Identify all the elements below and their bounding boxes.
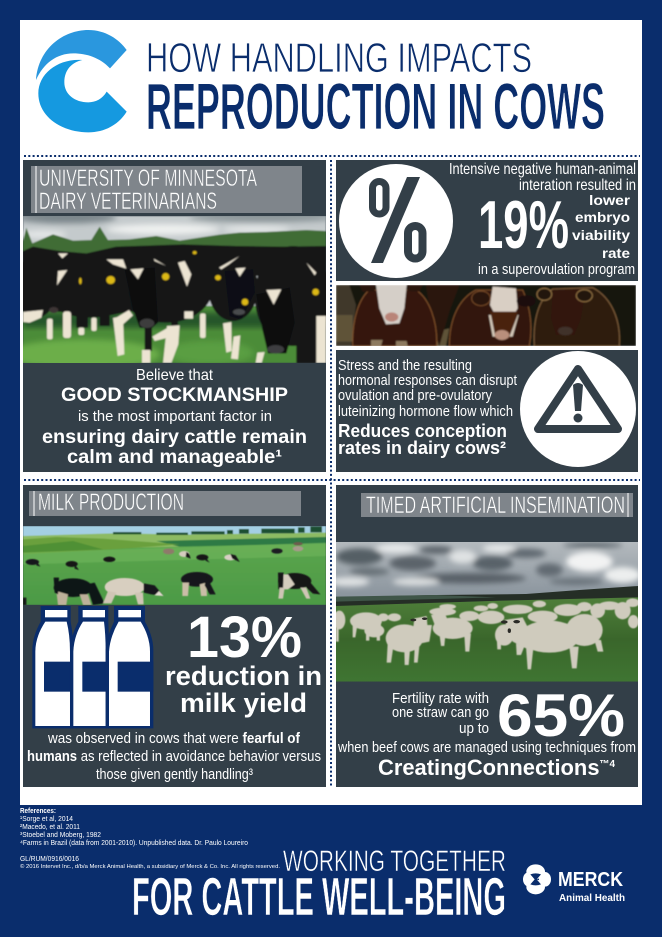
text: Believe that good stockmanship: is the most important factor in [78, 408, 272, 425]
references: ²Macedo, et al. 2011 [20, 824, 80, 831]
cattle [333, 598, 639, 669]
panel: timed artificial insemination [329, 485, 641, 787]
text: observed in fearful cows: was observed in cows that were fearful of [47, 730, 301, 747]
bottle two [70, 606, 109, 728]
text: Believe that good stockmanship: GOOD STOCKMANSHIP [61, 385, 288, 406]
photo: herd of black and white dairy cows [23, 216, 326, 363]
icon: percent sign in white circle [339, 164, 453, 278]
text: fertility rate with one straw: Fertility rate with [392, 690, 489, 707]
bottle three [106, 606, 153, 728]
text: negative interaction and 19% statistic: in a superovulation program [478, 261, 635, 278]
text: stress and hormonal responses [338, 357, 518, 458]
references: References: [20, 808, 56, 815]
heading label: University of Minnesota Dairy Veterinarians [31, 165, 302, 215]
heading label: University of Minnesota Dairy Veterinarians: UNIVERSITY OF MINNESOTA [39, 165, 257, 192]
text: stress and hormonal responses: ovulation and pre-ovulatory [338, 387, 492, 404]
text: Believe that good stockmanship: Believe that [136, 367, 214, 384]
text: Believe that good stockmanship [42, 367, 307, 468]
text: beef cows managed using CreatingConnections: CreatingConnections [378, 755, 600, 780]
title: HOW HANDLING IMPACTS [146, 34, 532, 81]
icon: three milk bottles [32, 606, 153, 728]
panel: 19% lower embryo viability [336, 160, 638, 281]
panel: stress reduces conception [336, 350, 638, 472]
statistic: 13% reduction in milk yield: reduction in [165, 661, 322, 691]
text: stress and hormonal responses: Stress and the resulting [338, 357, 472, 374]
heading label: University of Minnesota Dairy Veterinarians: DAIRY VETERINARIANS [39, 188, 217, 215]
text: beef cows managed using CreatingConnections [337, 739, 636, 780]
references: ⁴Farms in Brazil (data from 2001-2010). Unpublished data. Dr. Paulo Loureiro [20, 840, 248, 847]
text: fertility rate with one straw: up to [459, 720, 489, 737]
white content sheet [20, 20, 642, 805]
text: observed in fearful cows: humans as reflected in avoidance behavior versus [27, 748, 321, 765]
panel: milk production [23, 485, 326, 787]
Merck Animal Health logo [523, 864, 625, 904]
panel: University of Minnesota [6, 160, 336, 472]
text: negative interaction and 19% statistic: 19% [478, 187, 569, 263]
dotted section dividers [24, 156, 640, 787]
text: stress and hormonal responses: Reduces conception [338, 421, 507, 441]
text: negative interaction and 19% statistic: interation resulted in [519, 177, 636, 194]
text: stress and hormonal responses: rates in dairy cows² [338, 438, 506, 458]
text: negative interaction and 19% statistic [449, 161, 636, 278]
text: observed in fearful cows: those given gently handling³ [96, 766, 253, 783]
white legs and patches [23, 253, 326, 363]
Merck Animal Health logo: MERCK [558, 869, 623, 891]
text: fertility rate with one straw [392, 690, 489, 737]
logo: blue C swoosh [36, 30, 127, 132]
references [20, 808, 248, 847]
heading label: Milk Production: MILK PRODUCTION [38, 489, 184, 516]
text: Believe that good stockmanship: ensuring dairy cattle remain [42, 427, 307, 448]
text: negative interaction and 19% statistic: rate [602, 245, 630, 261]
text: observed in fearful cows [27, 730, 321, 783]
references: ³Stoebel and Moberg, 1982 [20, 832, 101, 839]
text: negative interaction and 19% statistic: viability [572, 227, 630, 243]
statistic: 65%: 65% [497, 682, 625, 749]
photo: three Hereford cattle [336, 285, 636, 346]
text: Believe that good stockmanship: calm and manageable¹ [67, 447, 282, 468]
photo: cows grazing in green pasture [23, 526, 326, 605]
references: ¹Sorge et al, 2014 [20, 816, 73, 823]
statistic: 13% reduction in milk yield: milk yield [180, 688, 307, 718]
cows [23, 542, 320, 605]
black bodies [15, 244, 331, 363]
icon: warning triangle in white circle [520, 351, 636, 467]
text: stress and hormonal responses: hormonal responses can disrupt [338, 372, 518, 389]
photo: white beef cattle under cloudy sky [329, 542, 641, 682]
text: negative interaction and 19% statistic: lower [589, 192, 631, 208]
text: beef cows managed using CreatingConnections: ™4 [600, 759, 615, 770]
document code and copyright: © 2016 Intervet Inc., d/b/a Merck Animal Health, a subsidiary of Merck & Co. Inc. All rights reserved. [20, 863, 280, 870]
document code and copyright: GL/RUM/0916/0016 [20, 856, 79, 863]
footer tagline: WORKING TOGETHER [283, 845, 506, 878]
Merck Animal Health logo: Animal Health [559, 893, 625, 904]
text: stress and hormonal responses: luteinizing hormone flow which [338, 403, 513, 420]
statistic: 13% reduction in milk yield: 13% [187, 605, 302, 670]
text: negative interaction and 19% statistic: embryo [575, 209, 630, 225]
footer tagline [132, 845, 506, 927]
document code and copyright [20, 856, 280, 870]
text: fertility rate with one straw: one straw can go [392, 704, 489, 721]
statistic: 13% reduction in milk yield [165, 605, 322, 718]
title [146, 34, 605, 143]
bottle one [32, 606, 73, 728]
